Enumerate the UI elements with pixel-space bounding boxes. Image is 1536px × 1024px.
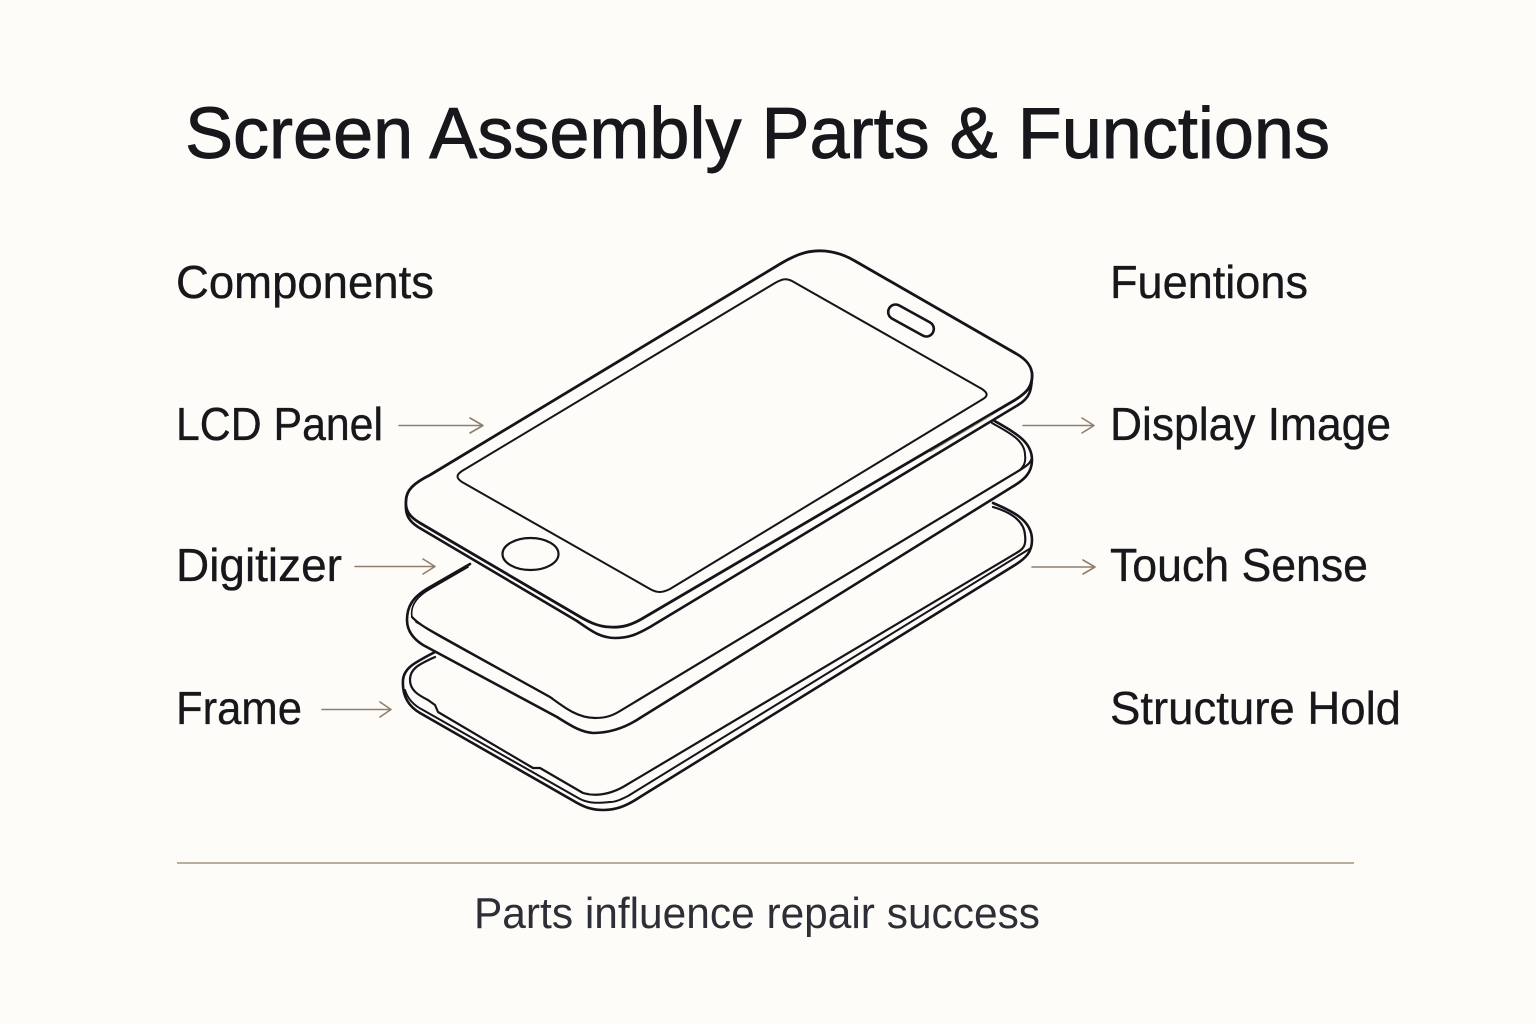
label: Structure Hold: Structure Hold <box>1110 682 1401 734</box>
label: Display Image: Display Image <box>1110 398 1391 450</box>
home button <box>502 538 558 570</box>
arrow: Frame <box>322 702 391 717</box>
label: LCD Panel: LCD Panel <box>176 398 383 450</box>
arrow: Digitizer <box>355 559 435 574</box>
label: Frame: Frame <box>176 682 302 734</box>
illustration: exploded phone screen assembly <box>403 251 1032 810</box>
speaker slot <box>885 302 937 339</box>
divider <box>177 862 1354 864</box>
layer: frame <box>403 503 1032 810</box>
edge highlight <box>930 415 992 452</box>
arrow: Display Image <box>1023 418 1094 433</box>
panel top face <box>406 251 1032 627</box>
arrow: Touch Sense <box>1032 560 1095 574</box>
label: Digitizer: Digitizer <box>176 539 342 591</box>
arrow: LCD Panel <box>399 418 483 433</box>
footer caption: Parts influence repair success <box>474 889 1040 938</box>
panel side edge <box>406 373 1032 638</box>
label: Touch Sense: Touch Sense <box>1110 539 1368 591</box>
right column: function labels <box>1110 256 1401 734</box>
screen outline <box>458 279 987 592</box>
left column: component labels <box>176 256 434 734</box>
layer: digitizer <box>407 420 1032 733</box>
layer: LCD panel <box>406 251 1032 638</box>
title: Screen Assembly Parts & Functions <box>185 94 1330 174</box>
heading: Fuentions: Fuentions <box>1110 256 1308 308</box>
heading: Components: Components <box>176 256 434 308</box>
